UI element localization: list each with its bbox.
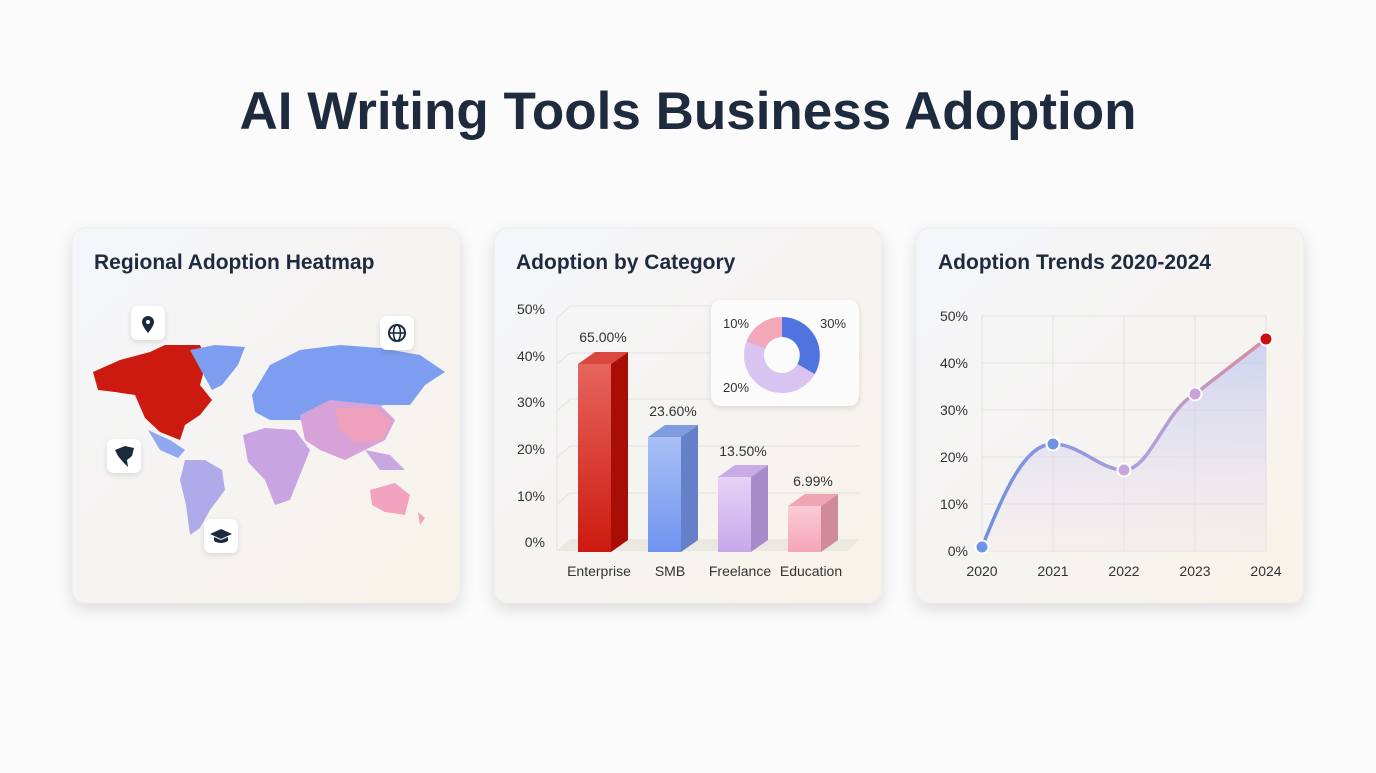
- bar chart: 23.60%: [649, 403, 697, 419]
- title: AI Writing Tools Business Adoption: [239, 82, 1137, 141]
- bar chart: 0%: [525, 534, 545, 550]
- line chart: 40%: [940, 355, 968, 371]
- world map: [93, 345, 445, 535]
- line chart: 0%: [948, 543, 968, 559]
- donut chart inset: 10%: [723, 316, 749, 331]
- icon: location pin: [131, 306, 165, 340]
- line chart: 20%: [940, 449, 968, 465]
- icon: north america: [107, 439, 141, 473]
- line chart: 10%: [940, 496, 968, 512]
- bar chart: 10%: [517, 488, 545, 504]
- icon: graduation cap: [204, 519, 238, 553]
- icon: globe: [380, 316, 414, 350]
- line chart: [940, 308, 1282, 579]
- panel: adoption by category: [494, 228, 882, 603]
- panel: regional adoption heatmap: [72, 228, 460, 603]
- line chart: 2021: [1037, 563, 1069, 579]
- donut chart inset: [711, 300, 859, 406]
- bar chart: 65.00%: [579, 329, 627, 345]
- bar chart: 20%: [517, 441, 545, 457]
- heading: trends: Adoption Trends 2020-2024: [938, 251, 1211, 274]
- bar chart: Freelance: [709, 563, 771, 579]
- donut chart inset: 30%: [820, 316, 846, 331]
- heading: category: Adoption by Category: [516, 251, 736, 274]
- bar chart: 30%: [517, 394, 545, 410]
- line chart: 2023: [1179, 563, 1211, 579]
- line chart: 2022: [1108, 563, 1140, 579]
- line chart: 50%: [940, 308, 968, 324]
- bar chart: 6.99%: [793, 473, 833, 489]
- line chart: 30%: [940, 402, 968, 418]
- heading: heatmap: Regional Adoption Heatmap: [94, 251, 374, 274]
- bar chart: SMB: [655, 563, 685, 579]
- bar chart: 50%: [517, 301, 545, 317]
- line chart: 2024: [1250, 563, 1282, 579]
- panel: adoption trends: [916, 228, 1304, 603]
- bar chart: 13.50%: [719, 443, 767, 459]
- bar chart: Enterprise: [567, 563, 631, 579]
- bar chart: Education: [780, 563, 842, 579]
- line chart: 2020: [966, 563, 998, 579]
- bar chart: 40%: [517, 348, 545, 364]
- donut chart inset: 20%: [723, 380, 749, 395]
- bar chart: [517, 301, 860, 579]
